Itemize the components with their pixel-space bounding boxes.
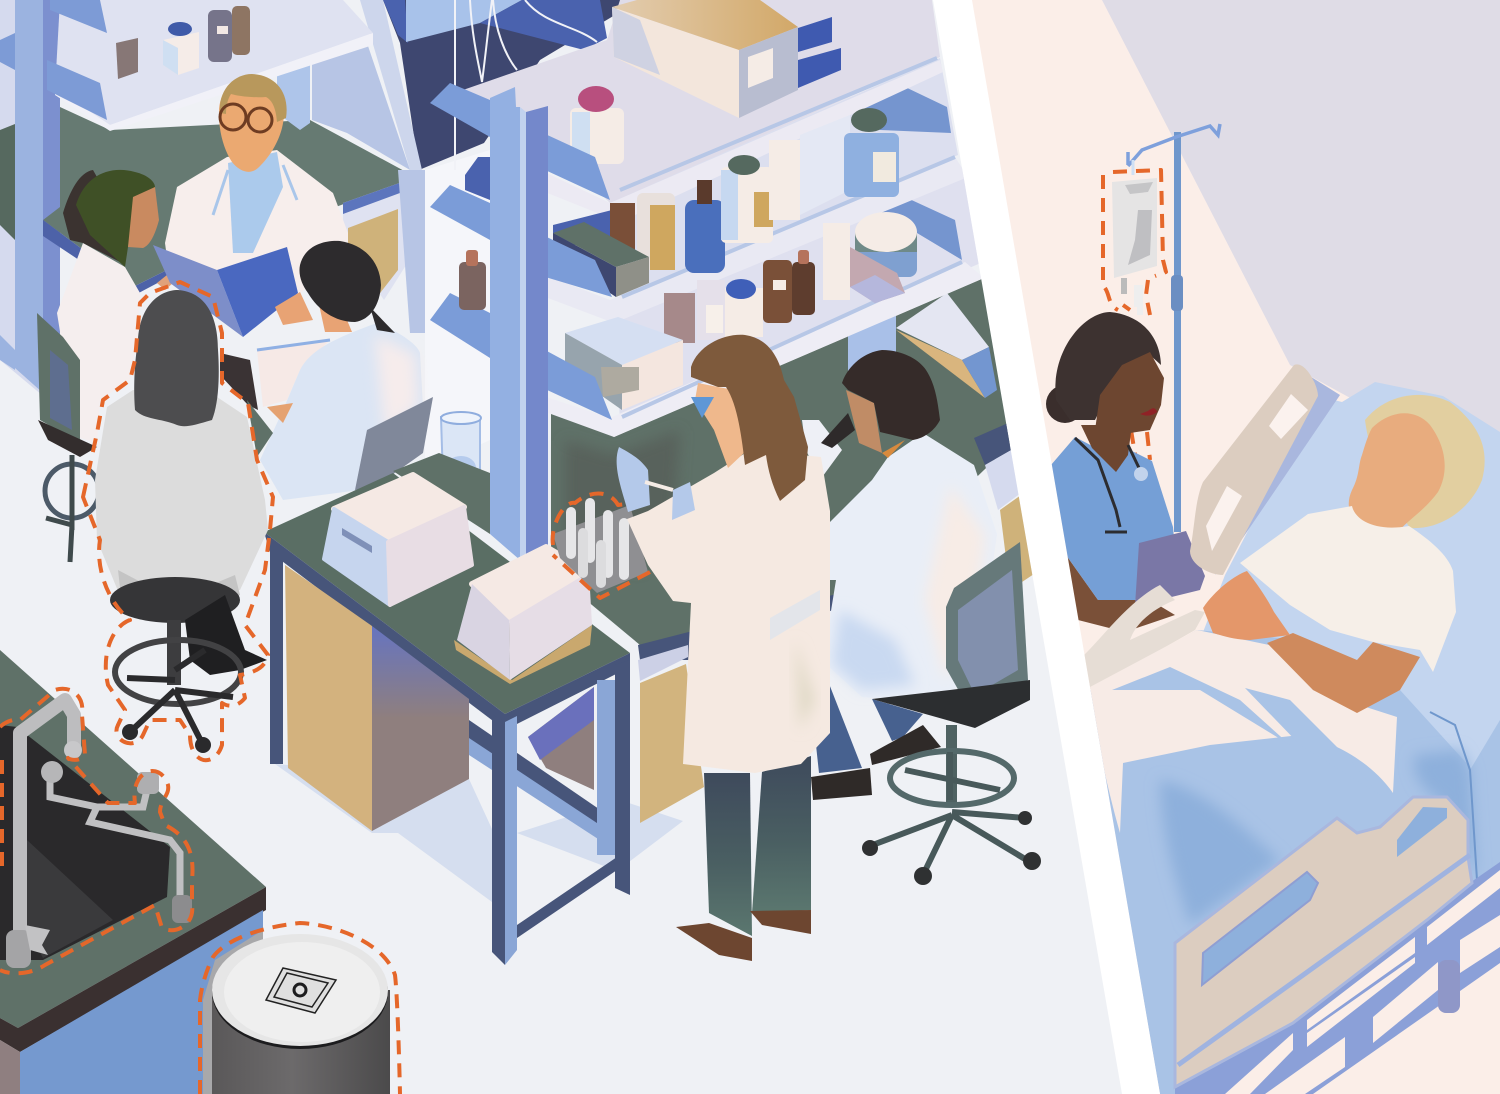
long bench behind scientists [393,278,1040,823]
small bottle on left shelf [459,250,486,310]
shelf end fences [430,83,612,420]
nurse [1046,312,1205,632]
office chair right [862,542,1041,885]
table legs and braces [469,660,630,965]
blue binder [153,245,298,337]
test tube rack, outlined [553,493,650,598]
support column [490,87,548,570]
left shelving unit [0,0,425,400]
stool behind hijab woman [37,313,99,562]
bed and blanket [1084,585,1500,1094]
panel: laboratory scene [0,0,1200,1094]
doctor with glasses [165,74,348,300]
faucet, outlined [0,689,193,973]
IV pole and bag [1103,124,1220,532]
back bench with green top [43,107,408,300]
hospital bed head and pillow [1190,364,1500,775]
bottles on shelf [116,6,250,79]
bed side rail [1175,797,1472,1087]
dark doorway and tubing [383,0,640,170]
sink counter [0,650,266,1094]
chemical drum [200,923,400,1094]
bottles and jars [553,0,917,410]
bed frame [1175,862,1500,1094]
flat box on bench [848,293,997,398]
man with dark hair [257,241,433,500]
large white box [565,317,683,410]
front table with instruments [264,473,650,965]
woman scientist with pipette [617,335,830,961]
instrument boxes [324,475,592,684]
man at microscope [802,350,997,800]
patient [1203,395,1485,713]
panel: hospital scene [960,0,1500,1094]
glass beaker [440,411,482,470]
scientist seen from behind, outlined [83,282,273,760]
hazard label [266,968,336,1013]
woman in hijab [57,170,172,332]
right shelving unit [430,0,984,570]
cardboard box [612,0,841,118]
